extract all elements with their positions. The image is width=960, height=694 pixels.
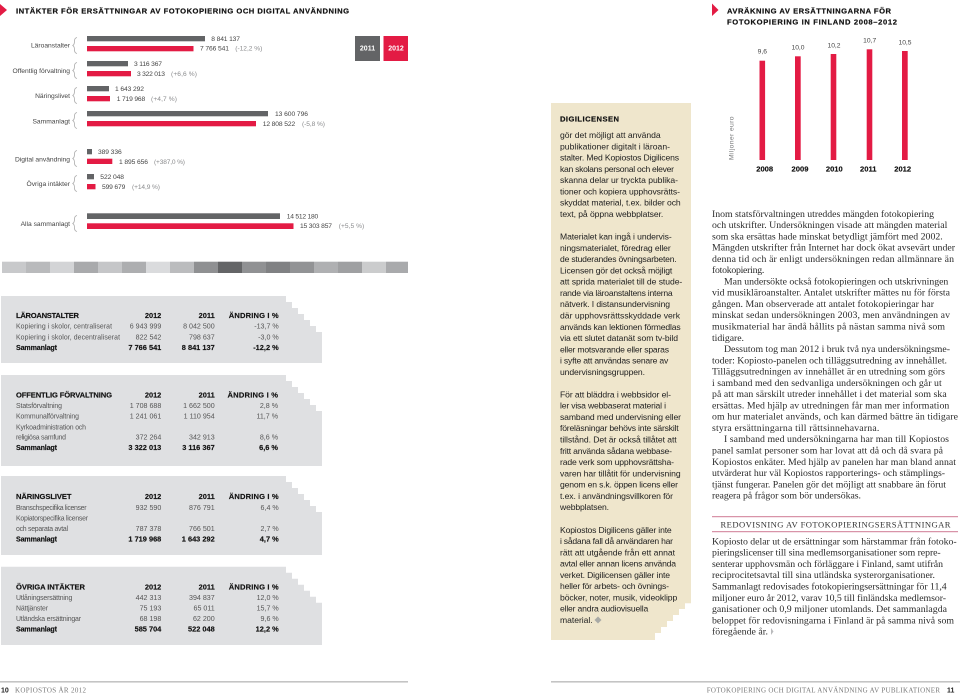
heading: settlement chart title: FOTOKOPIERING IN FINLAND 2008–2012 (727, 18, 897, 27)
panel: table Läroanstalter: 822 542 (136, 333, 161, 341)
panel: table Läroanstalter: 2012 (145, 311, 161, 320)
text block: main article: panel samlat personer som har lovat att då och då svara på (712, 446, 944, 456)
panel: Digilicensen sidebar: att sprida materialet till de stude- (560, 277, 682, 287)
panel: table Näringslivet: NÄRINGSLIVET (16, 492, 72, 501)
panel: table Övriga intäkter: Utlåningsersättning (16, 594, 72, 602)
row: Näringslivet: (+4,7 %) (151, 96, 177, 103)
row: Övriga intäkter: 599 679 (102, 184, 126, 191)
icon: end arrow (771, 628, 774, 635)
row: Offentlig förvaltning: Offentlig förvaltning (12, 68, 70, 75)
column chart: settlements 2008–2012: 2009 (792, 165, 808, 174)
panel: table Läroanstalter: Kopiering i skolor, decentraliserat (16, 334, 120, 341)
panel: table Näringslivet: 6,4 % (261, 504, 279, 512)
row: Digital användning: 389 336 (98, 149, 122, 156)
decorative band: grey squares (2, 262, 408, 273)
panel: table Offentlig förvaltning: OFFENTLIG FÖRVALTNING (16, 390, 112, 399)
text block: main article: som ska ersättas hade minskat betydligt jämfört med 2002. (712, 231, 943, 242)
panel: Digilicensen sidebar: Kopiostos Digilicens gäller inte (560, 525, 672, 535)
row: Digital användning: 1 895 656 (119, 159, 148, 166)
panel: table Offentlig förvaltning: 2011 (199, 390, 215, 399)
text block: Redovisning paragraph: miljoner euro år 2012, varav 10,5 till finländska medlemsor- (712, 593, 946, 604)
column chart: settlements 2008–2012: 2011 (860, 165, 877, 174)
column chart: settlements 2008–2012: 2008 (756, 165, 773, 174)
panel: table Läroanstalter: LÄROANSTALTER (16, 311, 80, 320)
text block: main article: Kopiostos enkäter. Med hjälp av panelen har man bland annat (712, 457, 956, 468)
panel: table Näringslivet: och separata avtal (16, 526, 68, 533)
text block: main article: Mängden utskrifter från Internet har dock ökat avsevärt under (712, 243, 956, 254)
footer: left page (0, 681, 408, 694)
panel: Digilicensen sidebar: t.ex. i användningsvillkoren för (560, 491, 673, 501)
panel: Digilicensen sidebar: de studerandes övningsarbeten. (560, 254, 677, 264)
column chart: settlements 2008–2012 (728, 37, 912, 174)
panel: Digilicensen sidebar: stalter. Med Kopiostos Digilicens (560, 153, 679, 163)
row: Övriga intäkter: 522 048 (100, 174, 124, 181)
panel: Digilicensen sidebar: rade verk som upphovsrättsha- (560, 457, 674, 467)
column chart: settlements 2008–2012: 2010 (826, 165, 843, 174)
panel: Digilicensen sidebar: fritt använda sådana webbase- (560, 446, 672, 456)
panel: Digilicensen sidebar: verket. Digilicensen gäller inte (560, 570, 670, 580)
panel: Digilicensen sidebar: via ett slutet datanät som tv-bild (560, 333, 678, 343)
panel: table Läroanstalter: Kopiering i skolor, centraliserat (16, 324, 112, 331)
panel: table Övriga intäkter: 12,0 % (257, 594, 279, 602)
row: Näringslivet: Näringslivet (35, 93, 70, 100)
column chart: settlements 2008–2012: 10,0 (791, 45, 805, 52)
panel: Digilicensen sidebar: webbplatsen. (559, 502, 609, 512)
panel: table Offentlig förvaltning: Statsförvaltning (16, 403, 62, 410)
column chart: settlements 2008–2012: 10,2 (827, 43, 841, 50)
panel: table Övriga intäkter: Utländska ersättningar (16, 616, 82, 623)
column chart: settlements 2008–2012: 2012 (894, 165, 911, 174)
panel: table Näringslivet: 766 501 (189, 525, 215, 533)
text block: Redovisning paragraph: senterar upphovsmän och förläggare i Finland, samt utifrån (712, 559, 943, 570)
panel: table Övriga intäkter: 2012 (145, 582, 161, 591)
panel: Digilicensen sidebar: varen har tillåtit för undervisning (560, 468, 681, 478)
text block: Redovisning paragraph: Kopiosto delar ut de ersättningar som härstammar från fotoko- (712, 536, 957, 547)
row: Läroanstalter (31, 36, 262, 54)
text block: main article: Man undersökte också fotokopieringen och utskrivningen (724, 276, 948, 287)
panel: table Övriga intäkter: 394 837 (189, 594, 215, 602)
text block: main article: Inom statsförvaltningen utreddes mängden fotokopiering (712, 209, 934, 220)
row: Offentlig förvaltning: 3 116 367 (134, 61, 162, 68)
panel: table Offentlig förvaltning: 2012 (145, 390, 161, 399)
panel: table Läroanstalter: Sammanlagt (16, 344, 58, 352)
panel: Digilicensen sidebar: kan skolans personal och elever (560, 164, 674, 174)
panel: table Offentlig förvaltning: 1 241 061 (130, 413, 161, 421)
panel: Digilicensen sidebar: text, på öppna webbplatser. (560, 209, 663, 219)
panel: table Offentlig förvaltning: 3 116 367 (182, 443, 215, 452)
panel: table Övriga intäkter: 65 011 (194, 605, 215, 613)
text block: Redovisning paragraph: föregående år. (712, 627, 768, 638)
text block: main article: I samband med undersökningarna har man till Kopiostos (724, 434, 949, 445)
panel: table Offentlig förvaltning: 2,8 % (260, 402, 279, 410)
panel: table Övriga intäkter: Nättjänster (16, 606, 49, 613)
text block: main article: på att man särskilt utreder innehållet i det material som ska (712, 389, 947, 400)
text block: Redovisning paragraph: reciprocitetsavtal till sina utländska systerorganisationer. (712, 570, 935, 581)
text block: Redovisning paragraph: ganisationer och 0,9 miljoner utomlands. Det sammanlagda (712, 604, 948, 615)
panel: table Läroanstalter (1, 296, 322, 363)
panel: table Offentlig förvaltning: Sammanlagt (16, 444, 58, 452)
panel: table Näringslivet: 2011 (199, 492, 215, 501)
row: Läroanstalter: Läroanstalter (31, 43, 71, 50)
panel: table Offentlig förvaltning: 1 662 500 (183, 402, 215, 410)
column chart: settlements 2008–2012: 9,6 (758, 49, 767, 56)
panel: table Offentlig förvaltning: 342 913 (189, 434, 215, 442)
panel: Digilicensen sidebar: samband med undervisning eller (560, 412, 681, 422)
row: Sammanlagt: 12 808 522 (263, 121, 295, 128)
icon: right section arrow (712, 4, 718, 16)
panel: Digilicensen sidebar: ningsmaterialet, föredrag eller (560, 243, 671, 253)
panel: table Näringslivet: 2,7 % (261, 525, 279, 533)
heading: income chart title: INTÄKTER FÖR ERSÄTTNINGAR AV FOTOKOPIERING OCH DIGITAL ANVÄNDNING (16, 7, 349, 16)
panel: table Offentlig förvaltning: ÄNDRING I % (228, 390, 278, 399)
row: Näringslivet (35, 86, 177, 104)
panel: Digilicensen sidebar (551, 103, 691, 640)
text block: main article: Tilläggsutredningen av innehållet är en utredning som görs (712, 367, 945, 378)
panel: Digilicensen sidebar: föreläsningar behövs inte särskilt (560, 423, 679, 433)
panel: table Övriga intäkter: 585 704 (135, 625, 162, 634)
panel: table Läroanstalter: ÄNDRING I % (229, 311, 279, 320)
panel: table Övriga intäkter: 522 048 (188, 625, 215, 634)
row: Offentlig förvaltning (12, 61, 197, 78)
text block: main article: musikmaterial har ändå hållits på nästan samma nivå som (712, 322, 945, 332)
text block: main article: om hur materialet används, och kan därmed bättre än tidigare (712, 412, 959, 423)
text block: main article: och utskrifter. Undersökningen visade att mängden material (712, 220, 948, 231)
panel: table Offentlig förvaltning: Kyrkoadministration och (16, 424, 86, 431)
panel: Digilicensen sidebar: eller motsvarande eller sparas (560, 344, 669, 354)
panel: Digilicensen sidebar: i syfte att användas senare av (560, 356, 669, 366)
heading: settlement chart title: AVRÄKNING AV ERSÄTTNINGARNA FÖR (727, 6, 892, 15)
panel: table Näringslivet: Sammanlagt (16, 535, 58, 543)
text block: main article: minskat sedan undersökningen 2003, men användningen av (712, 310, 950, 321)
panel: table Övriga intäkter: 442 313 (136, 594, 161, 602)
text block: Redovisning paragraph: pieringslicenser till sina medlemsorganisationer som repre- (712, 548, 941, 559)
heading: Redovisning section: REDOVISNING AV FOTOKOPIERINGSERSÄTTNINGAR (720, 519, 951, 529)
row: Övriga intäkter: Övriga intäkter (26, 180, 71, 188)
text block: main article: utvärderat hur väl Kopiostos rapporterings- och stämplings- (712, 468, 945, 479)
panel: Digilicensen sidebar: böcker, noter, musik, videoklipp (560, 592, 678, 602)
panel: table Offentlig förvaltning: 3 322 013 (128, 443, 161, 452)
panel: table Offentlig förvaltning (1, 375, 322, 466)
panel: Digilicensen sidebar: undervisningsgruppen. (560, 367, 645, 377)
row: Övriga intäkter: (+14,9 %) (132, 184, 160, 191)
panel: table Övriga intäkter: 68 198 (140, 615, 161, 623)
text block: main article: Dessutom tog man 2012 i bruk två nya undersökningsme- (724, 344, 950, 355)
column chart: settlements 2008–2012: Miljoner euro (728, 116, 736, 160)
panel: Digilicensen sidebar: publikationer digitalt i läroan- (560, 141, 670, 151)
panel: table Läroanstalter: -13,7 % (254, 323, 279, 331)
text block: main article: ersättas. Med hjälp av utredningen får man mer information (712, 400, 949, 411)
panel: table Näringslivet: 787 378 (136, 525, 161, 533)
panel: table Offentlig förvaltning: 8,6 % (260, 434, 279, 442)
text block: main article: i samband med den sedvanliga undersökningen och går ut (712, 378, 942, 389)
panel: table Näringslivet: Branschspecifika licenser (16, 505, 87, 512)
column chart: settlements 2008–2012: 10,7 (863, 37, 876, 44)
panel: Digilicensen sidebar: tillstånd. Det är också tillåtet att (560, 434, 677, 444)
panel: Digilicensen sidebar: rätt att utgående från ett annat (560, 547, 676, 557)
panel: table Övriga intäkter: ÖVRIGA INTÄKTER (16, 582, 86, 591)
panel: table Offentlig förvaltning: religiösa samfund (16, 435, 66, 442)
row: Digital användning (15, 149, 185, 166)
text block: main article: vid musikläroanstalter. Antalet utskrifter mättes nu för första (712, 288, 951, 299)
row: Sammanlagt: (-5,8 %) (302, 121, 325, 128)
panel: table Läroanstalter: 6 943 999 (130, 323, 161, 331)
icon: left section arrow (0, 4, 7, 16)
row: Sammanlagt: Sammanlagt (32, 118, 70, 125)
panel: table Näringslivet: 876 791 (189, 504, 215, 512)
text block: Redovisning paragraph (712, 536, 957, 638)
panel: Digilicensen sidebar: avtal eller annan licens använda (560, 559, 676, 569)
panel: table Övriga intäkter: 9,6 % (261, 615, 279, 623)
row: Sammanlagt: 13 600 796 (275, 111, 308, 118)
panel: Digilicensen sidebar: DIGILICENSEN (560, 114, 619, 123)
panel: Digilicensen sidebar: används kan lektionen förmedlas (560, 322, 681, 332)
panel: table Övriga intäkter (1, 567, 322, 645)
panel: table Läroanstalter: 798 637 (189, 333, 215, 341)
panel: Digilicensen sidebar: genom en s.k. öppen licens eller (560, 480, 678, 490)
text block: main article: denna tid och är enligt undersökningen redan allmännare än (712, 254, 954, 265)
row: Digital användning: (+387,0 %) (154, 159, 185, 166)
panel: Digilicensen sidebar: För att bläddra i webbsidor el- (560, 389, 671, 399)
panel: table Övriga intäkter: 12,2 % (256, 625, 279, 634)
panel: table Offentlig förvaltning: 11,7 % (256, 413, 279, 421)
row: Läroanstalter: (-12,2 %) (235, 46, 262, 53)
panel: table Näringslivet: 1 643 292 (182, 534, 215, 543)
panel: Digilicensen sidebar: nätverk. I distansundervisning (560, 299, 670, 309)
panel: table Läroanstalter: 2011 (199, 311, 215, 320)
panel: Digilicensen sidebar: i sådana fall då användaren har (560, 536, 673, 546)
panel: Digilicensen sidebar: skyddat material, t.ex. bilder och (560, 198, 681, 208)
panel: table Läroanstalter: 7 766 541 (128, 343, 161, 352)
panel: table Näringslivet: 4,7 % (260, 534, 279, 543)
row: Läroanstalter: 7 766 541 (200, 46, 229, 53)
text block: main article: toder: Kopiosto-panelen och tilläggsutredning av innehållet. (712, 355, 947, 366)
column chart: settlements 2008–2012: 10,5 (898, 39, 912, 46)
panel: table Näringslivet (1, 476, 322, 555)
panel: table Offentlig förvaltning: 6,6 % (259, 443, 278, 452)
panel: Digilicensen sidebar: heller för arbets- och övnings- (560, 581, 669, 591)
panel: table Näringslivet: Kopiatorspecifika licenser (16, 515, 89, 522)
panel: table Offentlig förvaltning: 372 264 (136, 434, 161, 442)
panel: table Näringslivet: 932 590 (136, 504, 161, 512)
panel: Digilicensen sidebar: Materialet kan ingå i undervis- (560, 232, 672, 242)
row: Alla sammanlagt: (+5,5 %) (339, 223, 364, 230)
row: Alla sammanlagt: 15 303 857 (300, 223, 332, 230)
text block: main article: tidigare. (712, 333, 744, 344)
row: Övriga intäkter (26, 174, 160, 192)
panel: Digilicensen sidebar: gör det möjligt att använda (560, 130, 661, 140)
heading: settlement chart title (727, 6, 897, 27)
panel: table Övriga intäkter: 75 193 (140, 605, 161, 613)
icon: end diamond (594, 616, 602, 624)
panel: table Övriga intäkter: Sammanlagt (16, 626, 58, 634)
panel: Digilicensen sidebar: tioner och kopiera upphovsrätts- (560, 186, 680, 196)
row: Alla sammanlagt (21, 213, 364, 232)
panel: table Läroanstalter: 8 841 137 (182, 343, 215, 352)
panel: Digilicensen sidebar: Licensen gör det också möjligt (560, 265, 673, 275)
row: Näringslivet: 1 719 968 (117, 96, 145, 103)
text block: main article: reagera på frågor som bör undersökas. (712, 491, 861, 502)
panel: table Offentlig förvaltning: Kommunalförvaltning (16, 414, 79, 421)
text block: main article: fotokopiering. (712, 265, 764, 276)
row: Offentlig förvaltning: 3 322 013 (137, 71, 165, 78)
panel: table Näringslivet: ÄNDRING I % (229, 492, 279, 501)
legend: years: 2011 (360, 46, 375, 52)
footer: right page (551, 681, 960, 694)
panel: table Övriga intäkter: 62 200 (193, 615, 215, 623)
panel: Digilicensen sidebar: eller andra audiovisuella (560, 604, 649, 614)
panel: table Näringslivet: 2012 (145, 492, 161, 501)
row: Näringslivet: 1 643 292 (115, 86, 144, 93)
panel: table Övriga intäkter: 2011 (199, 582, 215, 591)
text block: Redovisning paragraph: beloppet för redovisningarna i Finland är på samma nivå som (712, 615, 954, 626)
panel: Digilicensen sidebar: rande via läroanstaltens interna (560, 288, 673, 298)
row: Alla sammanlagt: Alla sammanlagt (21, 221, 70, 228)
panel: table Övriga intäkter: ÄNDRING I % (229, 582, 279, 591)
bar chart: income by category (12, 36, 364, 232)
row: Sammanlagt (32, 111, 325, 128)
panel: table Läroanstalter: 8 042 500 (183, 323, 215, 331)
panel: Digilicensen sidebar: ler visa webbaserat material i (560, 401, 666, 411)
row: Digital användning: Digital användning (15, 156, 70, 163)
panel: table Läroanstalter: -12,2 % (253, 343, 279, 352)
text block: main article (712, 209, 959, 502)
panel: table Offentlig förvaltning: 1 708 688 (130, 402, 161, 410)
panel: table Övriga intäkter: 15,7 % (257, 605, 279, 613)
panel: Digilicensen sidebar: material. (560, 615, 593, 625)
text block: main article: gången. Man observerade att antalet fotokopieringar har (712, 299, 935, 310)
panel: Digilicensen sidebar: skanna delar ur tryckta publika- (560, 175, 678, 185)
panel: table Läroanstalter: -3,0 % (258, 333, 279, 341)
row: Läroanstalter: 8 841 137 (211, 36, 240, 43)
legend: years (355, 36, 408, 61)
text block: main article: styra ersättningarna till rättsinnehavarna. (712, 423, 879, 434)
panel: Digilicensen sidebar: där upphovsrättsskyddade verk (560, 310, 681, 320)
panel: table Offentlig förvaltning: 1 110 954 (184, 413, 215, 421)
text block: Redovisning paragraph: Sammanlagt redovisades fotokopieringsersättningar för 11,4 (712, 582, 947, 592)
legend: years: 2012 (388, 46, 404, 52)
panel: table Näringslivet: 1 719 968 (128, 534, 161, 543)
row: Alla sammanlagt: 14 512 180 (287, 214, 318, 220)
row: Offentlig förvaltning: (+6,6 %) (171, 71, 197, 78)
text block: main article: tjänst fungerar. Panelen gör det möjligt att snabbare än förut (712, 479, 946, 490)
